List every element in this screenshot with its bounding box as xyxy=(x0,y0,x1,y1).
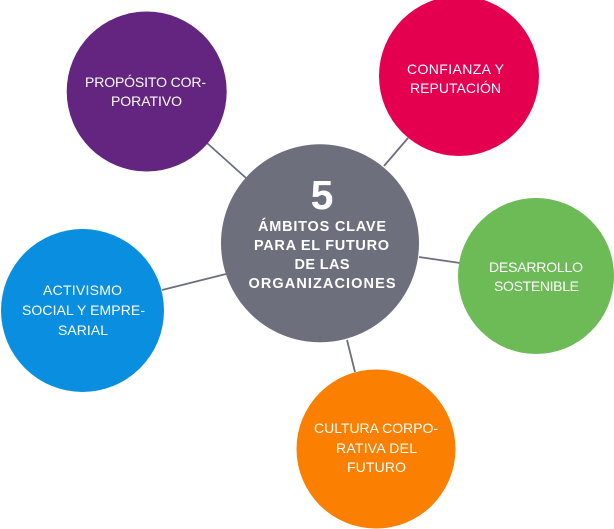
node: desarrollo sostenible: DESARROLLO xyxy=(489,259,583,275)
node: desarrollo sostenible xyxy=(458,198,614,354)
node: activismo social y empresarial: SOCIAL Y EMPRE- xyxy=(22,302,145,318)
node: confianza y reputación: REPUTACIÓN xyxy=(410,80,501,96)
node: confianza y reputación: CONFIANZA Y xyxy=(407,61,505,77)
node: confianza y reputación xyxy=(379,0,539,156)
node: desarrollo sostenible: SOSTENIBLE xyxy=(494,278,579,294)
node: propósito corporativo: PROPÓSITO COR- xyxy=(85,74,206,90)
number 5: 5 xyxy=(311,172,333,218)
central heading xyxy=(248,218,396,292)
node: cultura corporativa del futuro: CULTURA CORPO- xyxy=(314,420,438,436)
node: cultura corporativa del futuro xyxy=(296,370,456,528)
node: propósito corporativo xyxy=(67,12,227,172)
node: cultura corporativa del futuro: RATIVA DEL xyxy=(336,440,417,456)
central heading: DE LAS xyxy=(294,257,350,273)
central circle: title xyxy=(221,144,419,342)
central heading: PARA EL FUTURO xyxy=(254,238,389,254)
node: activismo social y empresarial xyxy=(1,229,164,392)
central heading: ÁMBITOS CLAVE xyxy=(258,218,386,235)
node: activismo social y empresarial: ACTIVISMO xyxy=(43,282,122,298)
node: activismo social y empresarial: SARIAL xyxy=(58,322,108,338)
node: cultura corporativa del futuro: FUTURO xyxy=(347,459,406,475)
central heading: ORGANIZACIONES xyxy=(248,276,396,292)
node: propósito corporativo: PORATIVO xyxy=(111,93,182,109)
connector lines xyxy=(162,138,460,372)
